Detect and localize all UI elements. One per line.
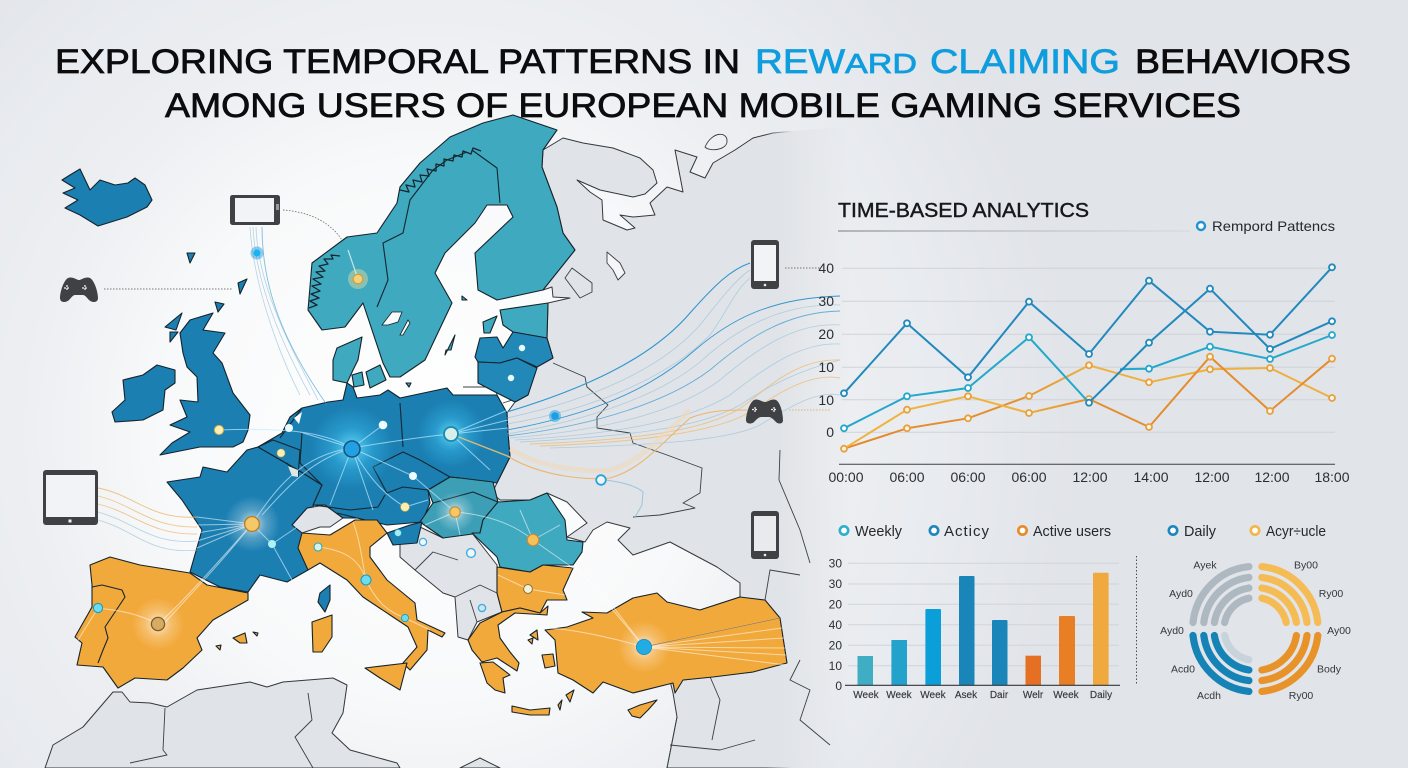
title: line one black: EXPLORING TEMPORAL PATTERNS IN [55, 43, 740, 81]
region: central europe [258, 383, 510, 525]
y axis labels: 40 [818, 260, 834, 276]
legend: rempord pattencs: Rempord Pattencs [1212, 218, 1335, 234]
node: croatia [419, 538, 427, 546]
node: ukraine [596, 475, 606, 485]
region: ireland [112, 365, 175, 422]
node: bulgaria [524, 585, 532, 593]
y axis labels: 30 [818, 293, 834, 309]
legend row [840, 523, 1326, 540]
grey borders [130, 134, 830, 768]
bar axis labels: 30 [829, 556, 842, 570]
bar gridlines [848, 563, 1119, 666]
bar category labels: Welr [1023, 690, 1044, 701]
x axis labels: 06:00 [950, 469, 986, 485]
x axis labels: 00:00 [828, 469, 864, 485]
land: north africa [45, 678, 400, 768]
node: latvia [519, 345, 525, 351]
bar category labels: Week [886, 690, 913, 701]
y axis labels: 20 [818, 326, 834, 342]
low countries lagoon [294, 412, 302, 424]
donut labels: Ay00 [1327, 625, 1351, 637]
region: uk [160, 313, 250, 455]
x axis labels: 06:00 [889, 469, 925, 485]
icon: lower phone [751, 511, 779, 559]
europe map [43, 115, 860, 768]
quadrant: blue [1193, 636, 1249, 691]
heading rule [838, 230, 1190, 232]
legend: daily: Daily [1184, 523, 1216, 540]
node: czechia [409, 472, 417, 480]
donut labels: Acdh [1197, 690, 1221, 702]
switzerland [292, 505, 343, 533]
quadrant: pale inner [1225, 636, 1249, 660]
y axis labels [818, 260, 834, 440]
donut labels: Body [1317, 664, 1342, 676]
node: germany north [379, 421, 387, 429]
region: scandinavia [308, 115, 575, 377]
bulgaria [497, 565, 573, 613]
title: highlighted reward: REW [755, 43, 845, 81]
node: portugal [93, 603, 103, 613]
legend: daily [1169, 523, 1216, 540]
node: italy north [314, 543, 322, 551]
node: hungary [450, 507, 460, 517]
dotted leader: controller to chart [789, 409, 830, 411]
slovakia and hungary [420, 477, 498, 538]
bars [858, 573, 1109, 685]
flow lines: left tablet to france [98, 488, 197, 551]
x axis labels [828, 469, 1350, 485]
sardinia [312, 615, 332, 652]
baltic islands [406, 296, 497, 387]
cyprus [628, 700, 657, 718]
node: netherlands [285, 424, 293, 432]
bar category labels: Dair [990, 690, 1009, 701]
sicily [365, 663, 407, 690]
series: blue two [1086, 286, 1335, 406]
nodes [93, 246, 652, 655]
land: eastern neighbours [492, 125, 860, 768]
luxembourg highlight [288, 466, 298, 477]
node: macedonia [478, 604, 486, 612]
bar category labels: Week [853, 690, 880, 701]
series: blue one [841, 264, 1335, 396]
node: turkey hub [636, 639, 652, 655]
donut labels: Ry00 [1289, 690, 1313, 702]
dotted leader: phone to chart [785, 267, 820, 269]
donut labels: Ayd0 [1160, 625, 1184, 637]
icon: controller left [60, 277, 98, 302]
series: teal [841, 332, 1335, 431]
node: poland hub [444, 427, 458, 441]
land: balkans [400, 527, 502, 640]
glow: france hub [224, 496, 280, 552]
bar axis labels: 20 [829, 638, 842, 652]
bar baseline [845, 684, 1120, 686]
node: germany hub [344, 441, 360, 457]
icon: left tablet [43, 470, 98, 525]
small northern islands [165, 253, 247, 342]
line chart [818, 260, 1350, 485]
aegean islands [528, 630, 574, 710]
latvia [475, 332, 553, 367]
title: line two: AMONG USERS OF EUROPEAN MOBILE GAMING SERVICES [165, 87, 1241, 125]
node: slovenia [394, 529, 402, 537]
x axis labels: 14:00 [1133, 469, 1169, 485]
node: france south [268, 540, 276, 548]
slovenia [387, 522, 422, 545]
bar axis labels: 0 [835, 679, 842, 693]
divider [1136, 556, 1138, 685]
balearic islands [216, 632, 258, 650]
node: romania [527, 534, 539, 546]
node: baltic flow [549, 410, 561, 422]
heading: time-based analytics: TIME-BASED ANALYTICS [838, 199, 1089, 222]
land: levant outline [460, 758, 500, 768]
iberia [75, 557, 248, 688]
dotted leader: controller to islands [104, 288, 232, 290]
glow: hungary hub [435, 492, 475, 532]
icon: top phone [751, 240, 779, 289]
quadrant: grey [1193, 567, 1249, 622]
donut labels: Ry00 [1319, 588, 1343, 600]
node: serbia [467, 549, 475, 557]
icon: top tablet [230, 195, 280, 225]
central europe borders [258, 403, 460, 518]
bar axis labels: 10 [829, 659, 842, 673]
greece [468, 606, 548, 693]
corsica [318, 585, 330, 612]
legend: active users: Active users [1033, 523, 1111, 540]
legend: acyr-ucle: Acyr÷ucle [1266, 523, 1326, 540]
title: highlighted small caps: ARD [845, 48, 917, 79]
scandinavia borders [377, 150, 500, 307]
estonia [500, 303, 548, 338]
bar axis labels: 40 [829, 618, 842, 632]
node: norway [348, 269, 368, 289]
legend: weekly: Weekly [855, 523, 902, 540]
quadrant: orange [1262, 636, 1318, 691]
dotted leader: tablet to norway [283, 210, 342, 240]
legend: acticy: Acticy [944, 523, 990, 540]
crete [512, 706, 550, 715]
node: top relay [250, 246, 264, 260]
series: orange one [844, 362, 1335, 449]
glow: germany hub [310, 406, 394, 490]
bar axis labels: 20 [829, 598, 842, 612]
bar category labels: Daily [1090, 690, 1112, 701]
quadrant: yellow [1262, 567, 1318, 622]
y axis labels: 10 [818, 392, 834, 408]
y axis labels: 0 [826, 424, 834, 440]
panel: time-based analytics [818, 199, 1350, 485]
title: highlighted claiming: CLAIMING [930, 43, 1120, 81]
chart gridlines [842, 268, 1335, 432]
bar category labels: Week [920, 690, 947, 701]
x axis labels: 06:00 [1011, 469, 1047, 485]
x axis labels: 12:00 [1072, 469, 1108, 485]
italy [298, 520, 445, 670]
turkey [545, 593, 787, 693]
glow: turkey hub [618, 621, 670, 673]
x axis labels: 18:00 [1314, 469, 1350, 485]
donut labels [1160, 560, 1351, 702]
network lines: western europe [78, 250, 786, 665]
region: iceland [62, 169, 152, 226]
title: line one end: BEHAVIORS [1135, 43, 1351, 81]
glow: poland hub [417, 400, 485, 468]
donut rings [1193, 567, 1318, 691]
node: italy south [401, 614, 409, 622]
bar axis labels: 30 [829, 577, 842, 591]
title [55, 43, 1351, 125]
bar axis labels [829, 556, 842, 693]
bar chart [829, 556, 1120, 701]
y axis labels: 10 [818, 359, 834, 375]
node: italy centre [361, 575, 371, 585]
icon: right controller [746, 399, 783, 424]
node: belgium [277, 449, 285, 457]
donut chart [1160, 560, 1351, 702]
glow: iberia hub [132, 598, 184, 650]
bar category labels: Asek [955, 690, 978, 701]
node: france hub [245, 517, 259, 531]
portugal border [92, 585, 125, 663]
series: orange two [841, 354, 1335, 452]
donut labels: Ayd0 [1169, 588, 1193, 600]
lithuania [478, 358, 537, 402]
bar category labels: Week [1053, 690, 1080, 701]
region: france [167, 447, 322, 592]
donut labels: Ayek [1193, 560, 1217, 572]
node: austria [401, 503, 409, 511]
denmark [333, 337, 386, 388]
x axis labels: 12:00 [1254, 469, 1290, 485]
flow lines: top tablet to europe [250, 227, 327, 405]
chart axis [839, 463, 1335, 465]
slovakia border [433, 492, 498, 503]
node: uk [214, 425, 224, 435]
donut labels: By00 [1294, 560, 1318, 572]
swedish lakes [382, 312, 410, 335]
flow lines: east fan to right panel [507, 263, 840, 517]
bar category labels [853, 690, 1112, 701]
node: iberia hub [151, 617, 165, 631]
x axis labels: 12:00 [1194, 469, 1230, 485]
romania [472, 493, 583, 572]
node: lithuania [508, 375, 514, 381]
donut labels: Acd0 [1171, 664, 1195, 676]
norwegian fjord coast [309, 148, 481, 308]
